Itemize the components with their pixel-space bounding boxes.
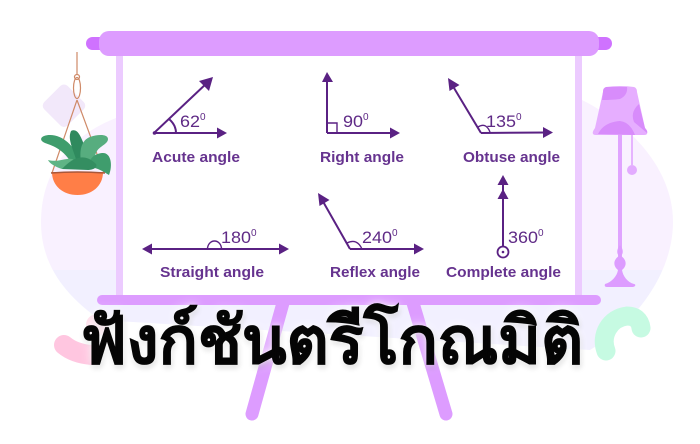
easel leg right [413, 303, 446, 414]
floor lamp [593, 86, 647, 287]
reflex angle diagram: 240 [362, 228, 392, 247]
roller [86, 31, 612, 56]
acute angle label: Acute angle [152, 149, 240, 166]
decorative diamond [41, 82, 87, 129]
right angle diagram: 0 [363, 112, 369, 123]
complete angle diagram: 0 [538, 228, 544, 239]
reflex angle diagram: 0 [392, 228, 398, 239]
background blob [30, 90, 680, 360]
straight angle diagram: 0 [251, 228, 257, 239]
complete angle label: Complete angle [446, 264, 561, 281]
obtuse angle diagram: 0 [516, 112, 522, 123]
screen [116, 56, 582, 296]
easel leg left [252, 303, 283, 414]
right angle diagram: 90 [343, 112, 363, 131]
obtuse angle label: Obtuse angle [463, 149, 560, 166]
reflex angle label: Reflex angle [330, 264, 420, 281]
pink blob upper [86, 314, 108, 336]
straight angle diagram [142, 228, 289, 254]
complete angle diagram [498, 175, 544, 258]
title: ฟังก์ชันตรีโกณมิติ [81, 306, 583, 378]
hanging plant [41, 52, 111, 195]
reflex angle diagram [318, 193, 424, 254]
acute angle diagram: 62 [180, 112, 200, 131]
obtuse angle diagram: 135 [486, 112, 516, 131]
right angle diagram [322, 72, 400, 138]
acute angle diagram [153, 77, 227, 138]
screen bottom bar [97, 295, 601, 305]
acute angle diagram: 0 [200, 112, 206, 123]
complete angle diagram: 360 [508, 228, 538, 247]
mint arc [604, 316, 641, 351]
straight angle diagram: 180 [221, 228, 251, 247]
right angle label: Right angle [320, 149, 404, 166]
obtuse angle diagram [448, 78, 553, 138]
straight angle label: Straight angle [160, 264, 264, 281]
pink blob [64, 345, 92, 355]
